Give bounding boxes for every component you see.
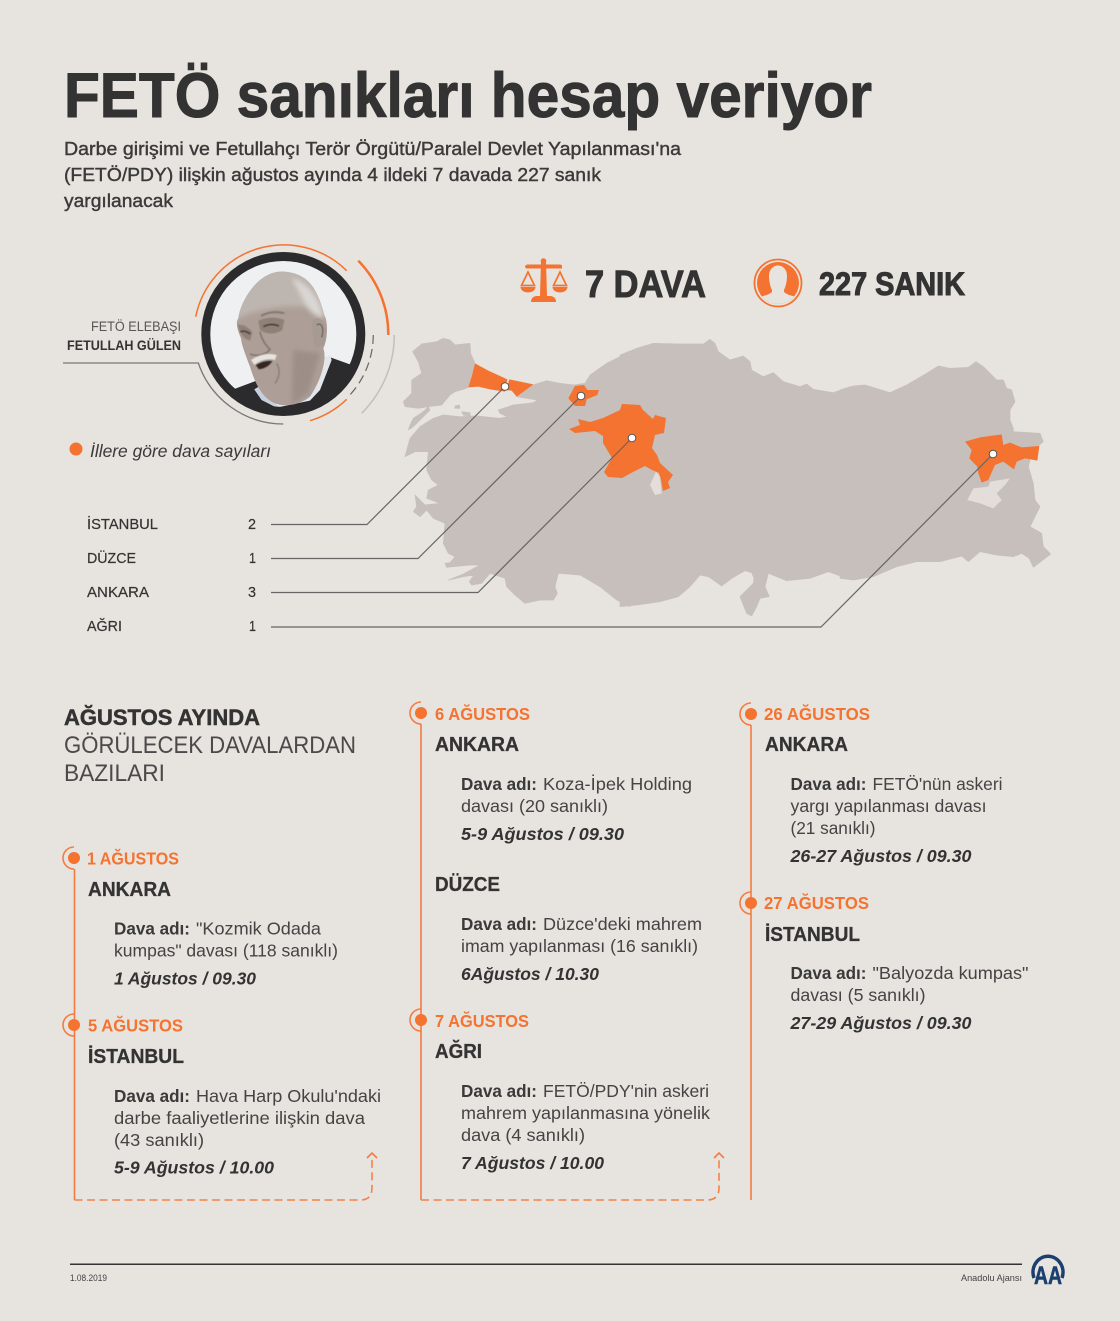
section heading: BAZILARI: [64, 760, 165, 787]
footer: [70, 1256, 1063, 1290]
entry: 26 Ağustos: FETÖ'nün askeri: [872, 774, 1002, 794]
stat: 7 dava: [520, 258, 706, 306]
label: Fetullah Gülen: FETÖ ELEBAŞI: [91, 317, 181, 334]
entry: 1 Ağustos: 1 AĞUSTOS: [87, 848, 179, 868]
province case list: AĞRI: [87, 618, 122, 635]
province case list: İSTANBUL: [87, 515, 158, 533]
entry: 6 Ağustos Ankara: davası (20 sanıklı): [461, 796, 608, 816]
province case list: 1: [249, 550, 256, 567]
entry: 1 Ağustos: ANKARA: [88, 878, 171, 901]
legend: cases by province: İllere göre dava sayıları: [90, 441, 271, 461]
photo: Fetullah Gülen: [206, 256, 362, 427]
stat: 227 sanık: 227 SANIK: [819, 266, 965, 302]
icon: scales: [520, 258, 568, 302]
entry: 7 Ağustos: 7 AĞUSTOS: [435, 1010, 529, 1031]
entry: 6 Ağustos Düzce: imam yapılanması (16 sanıklı): [461, 936, 698, 956]
entry: 6 Ağustos Ankara: Dava adı:: [461, 774, 537, 794]
province case list: [87, 515, 256, 635]
province case list: 1: [249, 618, 256, 635]
timeline: column 3: [740, 703, 1028, 1200]
entry: 1 Ağustos: "Kozmik Odada: [196, 918, 321, 938]
entry: 6 Ağustos Ankara: ANKARA: [435, 733, 519, 756]
entry: 1 Ağustos: kumpas" davası (118 sanıklı): [114, 940, 338, 960]
entry: 6 Ağustos Düzce: Düzce'deki mahrem: [543, 914, 702, 934]
timeline rail: [421, 724, 724, 1200]
entry: 6 Ağustos Düzce: DÜZCE: [435, 873, 500, 896]
entry: 6 Ağustos Düzce: [435, 873, 702, 984]
entry: 1 Ağustos: 1 Ağustos / 09.30: [114, 968, 256, 988]
entry: 26 Ağustos: ANKARA: [765, 733, 848, 756]
entry: 26 Ağustos: 26-27 Ağustos / 09.30: [789, 846, 972, 866]
section heading: [64, 705, 356, 787]
entry: 7 Ağustos: 7 Ağustos / 10.00: [461, 1153, 604, 1173]
entry: 6 Ağustos Ankara: 6 AĞUSTOS: [435, 703, 530, 724]
footer: Anadolu Ajansı: [961, 1273, 1022, 1283]
entry: 7 Ağustos: [410, 1009, 710, 1173]
map: centre: [620, 339, 850, 616]
map: Ankara: [569, 404, 673, 491]
entry: 5 Ağustos: darbe faaliyetlerine ilişkin dava: [114, 1108, 365, 1128]
province case list: DÜZCE: [87, 549, 136, 567]
decorative arcs: [63, 245, 394, 424]
map: lakes: [650, 472, 1010, 508]
entry: 6 Ağustos Ankara: 5-9 Ağustos / 09.30: [461, 824, 624, 844]
timeline rail: [750, 725, 752, 1200]
entry: 5 Ağustos: Dava adı:: [114, 1086, 190, 1106]
entry: 26 Ağustos: [740, 703, 1002, 866]
map: İstanbul: [468, 363, 533, 397]
map of Turkey: [403, 338, 1051, 616]
portrait with rings: [63, 245, 394, 427]
entry: 5 Ağustos: [63, 1014, 381, 1178]
entry: 26 Ağustos: 26 AĞUSTOS: [764, 703, 870, 724]
subtitle: Darbe girişimi ve Fetullahçı Terör Örgütü/Paralel Devlet Yapılanması'na: [64, 138, 682, 159]
entry: 27 Ağustos: davası (5 sanıklı): [790, 985, 926, 1005]
entry: 27 Ağustos: Dava adı:: [790, 963, 866, 983]
entry: 27 Ağustos: 27-29 Ağustos / 09.30: [789, 1013, 972, 1033]
stat: 7 dava: 7 DAVA: [585, 264, 706, 306]
entry: 7 Ağustos: FETÖ/PDY'nin askeri: [543, 1081, 709, 1101]
timeline: column 2: [410, 702, 724, 1200]
stat: 227 sanık: [754, 260, 965, 306]
map: Düzce: [568, 385, 599, 406]
logo: Anadolu Ajansı: [1033, 1256, 1063, 1290]
entry: 7 Ağustos: AĞRI: [435, 1039, 482, 1063]
entry: 27 Ağustos: "Balyozda kumpas": [872, 963, 1028, 983]
map: Ağrı: [965, 434, 1039, 483]
province case list: 3: [248, 584, 256, 601]
entry: 7 Ağustos: dava (4 sanıklı): [461, 1125, 585, 1145]
entry: 6 Ağustos Düzce: Dava adı:: [461, 914, 537, 934]
entry: 26 Ağustos: (21 sanıklı): [790, 818, 876, 838]
entry: 1 Ağustos: [63, 847, 338, 988]
entry: 5 Ağustos: (43 sanıklı): [114, 1130, 204, 1150]
province case list: 2: [248, 516, 256, 533]
title: FETÖ sanıkları hesap veriyor: [64, 61, 872, 131]
label: Fetullah Gülen: [67, 317, 181, 353]
entry: 1 Ağustos: Dava adı:: [114, 918, 190, 938]
leader lines and markers: [271, 383, 997, 627]
entry: 6 Ağustos Ankara: Koza-İpek Holding: [543, 774, 692, 794]
entry: 5 Ağustos: İSTANBUL: [88, 1045, 184, 1068]
entry: 27 Ağustos: 27 AĞUSTOS: [764, 892, 869, 913]
entry: 6 Ağustos Düzce: 6Ağustos / 10.30: [461, 964, 599, 984]
logo: Anadolu Ajansı: AA: [1034, 1262, 1062, 1290]
subtitle: yargılanacak: [64, 190, 174, 211]
entry: 5 Ağustos: Hava Harp Okulu'ndaki: [196, 1086, 381, 1106]
map: east: [840, 362, 1051, 580]
section heading: GÖRÜLECEK DAVALARDAN: [64, 732, 356, 759]
entry: 27 Ağustos: [740, 892, 1028, 1033]
timeline rail: [74, 869, 377, 1200]
subtitle: (FETÖ/PDY) ilişkin ağustos ayında 4 ildeki 7 davada 227 sanık: [64, 164, 602, 185]
section heading: AĞUSTOS AYINDA: [64, 705, 260, 730]
label: Fetullah Gülen: FETULLAH GÜLEN: [67, 337, 181, 353]
entry: 7 Ağustos: Dava adı:: [461, 1081, 537, 1101]
entry: 27 Ağustos: İSTANBUL: [765, 923, 860, 946]
province case list: ANKARA: [87, 584, 149, 601]
timeline: column 1: [63, 847, 381, 1200]
entry: 26 Ağustos: Dava adı:: [790, 774, 866, 794]
map: west: [403, 338, 630, 607]
footer: 1.08.2019: [70, 1273, 107, 1283]
entry: 7 Ağustos: mahrem yapılanmasına yönelik: [461, 1103, 710, 1123]
subtitle: [64, 138, 682, 211]
icon: person: [754, 260, 802, 306]
entry: 5 Ağustos: 5-9 Ağustos / 10.00: [114, 1158, 274, 1178]
entry: 6 Ağustos Ankara: [410, 702, 692, 844]
entry: 5 Ağustos: 5 AĞUSTOS: [88, 1014, 183, 1036]
entry: 26 Ağustos: yargı yapılanması davası: [790, 796, 986, 816]
